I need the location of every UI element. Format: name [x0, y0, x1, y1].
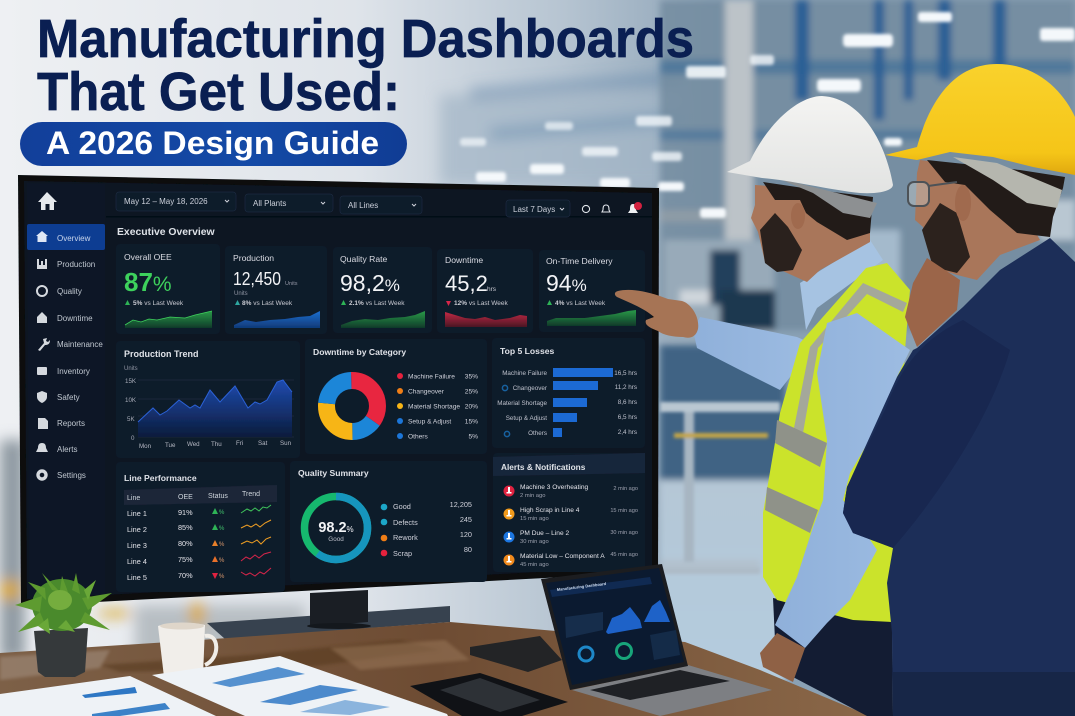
status markers	[212, 508, 225, 580]
status markers: %	[219, 558, 225, 564]
alert rows	[504, 484, 638, 568]
legend: 20%	[465, 404, 478, 410]
chart: top 5 losses: Machine Failure	[502, 370, 547, 377]
nav labels: Production	[57, 260, 95, 269]
jacket	[843, 238, 1075, 716]
kpi: downtime: Downtime	[445, 255, 483, 265]
table: line performance: Line 4	[127, 557, 147, 566]
nav labels: Safety	[57, 393, 80, 402]
chart: production trend: Mon	[139, 443, 152, 450]
table: line performance: 91%	[178, 508, 193, 517]
icon: home logo	[38, 192, 57, 210]
chart: top 5 losses: 8,6 hrs	[618, 399, 637, 406]
kpi: production: Units	[285, 281, 298, 287]
nav labels: Settings	[57, 471, 86, 480]
alert rows: 45 min ago	[520, 562, 549, 568]
table: line performance: Status	[208, 493, 228, 500]
alert rows: Material Low – Component A	[520, 553, 605, 560]
notebook and tablet	[410, 636, 568, 716]
shirt collar	[800, 240, 883, 330]
nav labels: Reports	[57, 419, 85, 428]
kpi: production: Production	[233, 253, 274, 263]
chart: downtime by category	[305, 339, 487, 454]
chart: top 5 losses: Material Shortage	[497, 400, 547, 407]
kpi: downtime	[437, 249, 533, 333]
status markers: %	[219, 574, 225, 580]
laptop	[541, 564, 772, 716]
panel: quality summary: 98.2%	[318, 520, 354, 536]
heading: executive overview: Executive Overview	[117, 227, 216, 238]
top filter bar: May 12 – May 18, 2026	[124, 197, 208, 206]
legend: Material Shortage	[408, 404, 460, 410]
hair	[927, 160, 1065, 237]
chart: top 5 losses: Others	[528, 430, 547, 437]
kpi: downtime: 45,2	[445, 271, 488, 296]
shirt sleeve	[775, 313, 910, 648]
kpi: quality rate	[333, 247, 432, 333]
kpi: overall oee: 87%	[124, 267, 172, 297]
legend: 5%	[468, 434, 478, 440]
chart: production trend: 5K	[127, 416, 135, 423]
table: line performance: Line 2	[127, 525, 147, 534]
legend: Scrap	[393, 549, 412, 558]
kpi: on-time delivery: 94%	[546, 270, 587, 296]
desk	[0, 622, 870, 716]
nav labels: Quality	[57, 287, 82, 296]
status markers: %	[219, 510, 225, 516]
legend: Rework	[393, 533, 418, 542]
nav item: overview active: Overview	[57, 234, 91, 243]
laptop: Manufacturing Dashboard	[557, 581, 607, 592]
nav labels: Downtime	[57, 314, 93, 323]
worker: white helmet	[693, 96, 910, 716]
chart: production trend	[116, 341, 300, 458]
panel: alerts and notifications: Alerts & Notifications	[501, 462, 586, 472]
pointing arm	[693, 317, 815, 390]
coffee mug	[158, 622, 216, 682]
table: line performance	[116, 462, 285, 592]
chart: top 5 losses: 2,4 hrs	[618, 429, 637, 436]
monitor	[18, 175, 659, 606]
chart: downtime by category: Downtime by Category	[313, 347, 406, 357]
icon: alert bell with badge	[628, 202, 642, 213]
chart: production trend: Units	[124, 366, 138, 372]
yellow hard hat	[885, 64, 1075, 175]
top filter bar: Last 7 Days	[513, 205, 555, 214]
icon: bell	[602, 205, 610, 212]
nav labels: Alerts	[57, 445, 77, 454]
chart: production trend: Fri	[236, 440, 243, 447]
table: line performance: Line 3	[127, 541, 147, 550]
top filter bar	[106, 192, 652, 218]
legend: Good	[393, 502, 411, 511]
kpi: production: 12,450	[233, 269, 281, 289]
panel: quality summary: Good	[328, 536, 344, 543]
alert rows: 2 min ago	[613, 486, 638, 492]
kpi: on-time delivery: On-Time Delivery	[546, 256, 613, 266]
hard hat band	[953, 157, 1062, 208]
alert rows: 30 min ago	[610, 530, 638, 536]
chart: top 5 losses: Setup & Adjust	[506, 415, 547, 422]
panel: alerts and notifications	[493, 453, 645, 572]
worker: pointing hand	[615, 290, 698, 338]
title: That Get Used:	[37, 62, 400, 122]
alert rows: 30 min ago	[520, 539, 549, 545]
alert rows: High Scrap in Line 4	[520, 507, 580, 514]
sidebar	[27, 183, 105, 599]
kpi: on-time delivery: 4% vs Last Week	[555, 300, 606, 307]
table: line performance: 85%	[178, 523, 193, 532]
chart: production trend: Thu	[211, 441, 222, 448]
panel: quality summary: Quality Summary	[298, 468, 369, 478]
panel: quality summary	[290, 461, 487, 582]
hair	[763, 182, 873, 240]
top filter bar: All Lines	[348, 201, 378, 210]
chart: production trend: Production Trend	[124, 349, 199, 359]
table: line performance: 70%	[178, 571, 193, 580]
table: line performance: 80%	[178, 539, 193, 548]
table: line performance: Line	[127, 495, 140, 502]
legend: 80	[464, 545, 472, 554]
monitor stand	[207, 590, 450, 639]
chart: production trend: 10K	[125, 397, 137, 404]
chart: top 5 losses: Top 5 Losses	[500, 346, 555, 356]
top filter bar: All Plants	[253, 199, 286, 208]
legend: Defects	[393, 518, 418, 527]
hand at chin	[905, 258, 960, 347]
chart: production trend: Wed	[187, 441, 200, 448]
kpi: quality rate: 2.1% vs Last Week	[349, 300, 405, 307]
legend	[381, 500, 472, 558]
chart: production trend: Tue	[165, 442, 176, 449]
table: line performance: 75%	[178, 555, 193, 564]
status markers: %	[219, 542, 225, 548]
nav labels: Maintenance	[57, 340, 103, 349]
kpi: quality rate: 98,2%	[340, 270, 400, 296]
hi-vis vest	[763, 263, 910, 622]
trousers	[773, 598, 893, 716]
legend: 15%	[465, 418, 478, 426]
legend: 12,205	[450, 500, 472, 509]
neck and face	[751, 185, 870, 282]
glasses	[908, 182, 957, 206]
legend: 245	[460, 515, 472, 524]
beard	[760, 213, 802, 272]
alert rows: 15 min ago	[520, 516, 549, 522]
alert rows: 15 min ago	[610, 508, 638, 514]
kpi: downtime: 12% vs Last Week	[454, 300, 508, 307]
trend sparklines	[241, 505, 271, 576]
status markers: %	[219, 526, 225, 532]
table: line performance: Line 5	[127, 573, 147, 582]
hard hat band	[777, 178, 877, 218]
title	[37, 9, 694, 122]
neck and face	[915, 160, 1040, 280]
beard	[922, 203, 970, 273]
legend: Machine Failure	[408, 374, 455, 380]
table: line performance: Trend	[242, 491, 260, 498]
kpi: production	[225, 246, 327, 334]
icon: refresh	[582, 205, 590, 213]
printed report left	[0, 676, 216, 716]
subtitle pill: A 2026 Design Guide	[46, 125, 379, 161]
kpi: downtime: hrs	[487, 286, 497, 293]
kpi: overall oee	[116, 244, 220, 334]
hand on desk	[760, 633, 805, 682]
kpi: production: Units	[234, 291, 248, 297]
legend: 120	[460, 530, 472, 539]
chart: production trend: Sun	[280, 440, 292, 447]
chart: production trend: 0	[131, 435, 135, 442]
kpi: overall oee: Overall OEE	[124, 252, 172, 262]
legend: 25%	[465, 388, 478, 396]
donut	[304, 496, 368, 560]
legend	[397, 373, 478, 440]
alert rows: PM Due – Line 2	[520, 530, 569, 537]
nav labels	[57, 260, 103, 480]
chart: top 5 losses: 6,5 hrs	[618, 414, 637, 421]
table: line performance: Line 1	[127, 509, 147, 518]
plant in pot	[15, 573, 112, 677]
nav labels: Inventory	[57, 367, 90, 376]
nav item: overview active	[27, 224, 105, 250]
donut	[326, 380, 378, 432]
alert rows: 2 min ago	[520, 493, 545, 499]
table: line performance: Line Performance	[124, 473, 197, 483]
alert rows: 45 min ago	[610, 552, 638, 558]
chart: production trend: 15K	[125, 378, 137, 385]
kpi: production: 8% vs Last Week	[242, 300, 293, 307]
white hard hat	[727, 96, 893, 193]
legend: Changeover	[408, 388, 445, 396]
legend: Setup & Adjust	[408, 418, 451, 426]
printed report right	[152, 656, 448, 716]
chart: production trend: Sat	[258, 440, 268, 447]
chart: top 5 losses	[492, 338, 645, 448]
kpi: on-time delivery	[539, 250, 645, 332]
worker: yellow helmet	[843, 64, 1075, 716]
title: Manufacturing Dashboards	[37, 9, 694, 69]
chart: top 5 losses: Changeover	[513, 385, 547, 392]
chart: top 5 losses: 16,5 hrs	[614, 370, 637, 377]
subtitle pill	[20, 122, 407, 166]
alert rows: Machine 3 Overheating	[520, 484, 589, 491]
legend: Others	[408, 434, 428, 440]
chart: top 5 losses: 11,2 hrs	[615, 384, 637, 391]
legend: 35%	[465, 374, 478, 380]
kpi: quality rate: Quality Rate	[340, 254, 388, 264]
kpi: overall oee: 5% vs Last Week	[133, 300, 184, 307]
nav icons	[36, 259, 50, 479]
table: line performance: OEE	[178, 494, 193, 501]
